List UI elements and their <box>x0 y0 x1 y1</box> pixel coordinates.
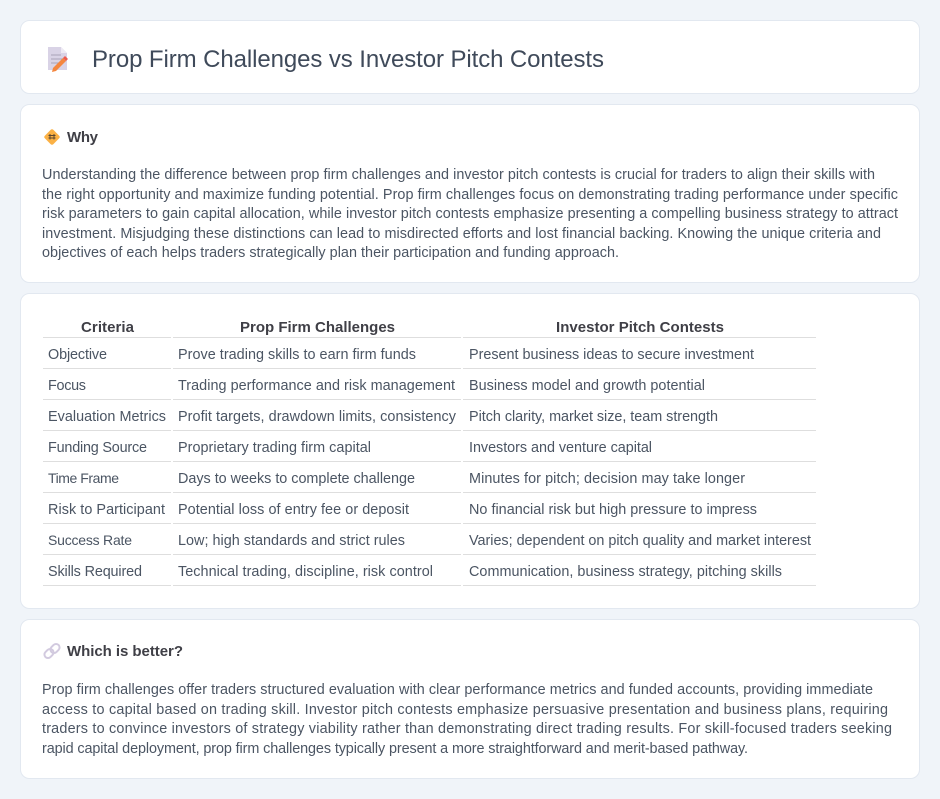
row: evaluation metrics: Profit targets, drawdown limits, consistency <box>178 409 457 425</box>
row: objective: Present business ideas to secure investment <box>469 347 754 363</box>
row: time frame <box>48 470 745 487</box>
row: evaluation metrics: Pitch clarity, market size, team strength <box>469 409 718 425</box>
row: skills required: Skills Required <box>48 564 142 580</box>
row: risk to participant: Potential loss of entry fee or deposit <box>178 502 409 518</box>
row: skills required: Communication, business strategy, pitching skills <box>469 564 782 580</box>
row: risk to participant: Risk to Participant <box>48 502 165 518</box>
row: focus <box>48 378 705 394</box>
row: funding source: Investors and venture capital <box>469 440 652 456</box>
text block: why: risk parameters to gain capital allocation, while investor pitch contests emphasize presenting a compelling business strategy to attract <box>42 206 898 222</box>
text block: why: the right opportunity and maximize funding potential. Prop firm challenges focus on demonstrating trading performance under specific <box>42 187 898 203</box>
text block: which is better <box>42 682 892 757</box>
row: skills required <box>48 564 782 580</box>
panel: comparison table <box>20 294 920 608</box>
row: time frame: Minutes for pitch; decision may take longer <box>469 471 745 487</box>
text block: why: objectives of each helps traders strategically plan their participation and funding approach. <box>42 245 619 261</box>
row: objective <box>48 347 754 363</box>
text block: why: Understanding the difference between prop firm challenges and investor pitch contests is crucial for traders to align their skills with <box>42 167 875 183</box>
title: Prop Firm Challenges vs Investor Pitch Contests <box>92 46 604 73</box>
table header: Prop Firm Challenges <box>240 319 395 336</box>
row: focus: Focus <box>48 378 86 394</box>
row: objective: Prove trading skills to earn firm funds <box>178 347 416 363</box>
row: funding source <box>48 440 652 456</box>
row: success rate: Success Rate <box>48 532 132 548</box>
icon: link <box>43 642 61 660</box>
heading: which is better: Which is better? <box>67 643 183 660</box>
text block: which is better: rapid capital deployment, prop firm challenges typically present a more straightforward and merit-based pathway. <box>42 741 748 757</box>
row: evaluation metrics: Evaluation Metrics <box>48 409 166 425</box>
panel: why <box>20 104 920 282</box>
row: skills required: Technical trading, discipline, risk control <box>178 564 433 580</box>
table header: Investor Pitch Contests <box>556 319 724 336</box>
row: risk to participant: No financial risk but high pressure to impress <box>469 502 757 518</box>
row: focus: Business model and growth potential <box>469 378 705 394</box>
row: funding source: Proprietary trading firm capital <box>178 440 371 456</box>
text block: which is better: access to capital based on trading skill. Investor pitch contests emphasize persuasive presentation and business plans, requiring <box>42 702 888 718</box>
icon: diamond warning sign <box>44 129 60 145</box>
panel: header <box>20 20 920 94</box>
row: evaluation metrics <box>48 409 718 425</box>
row: success rate <box>48 532 811 549</box>
table header <box>81 319 724 336</box>
panel: which is better <box>20 620 920 778</box>
text block: which is better: Prop firm challenges offer traders structured evaluation with clear performance metrics and funded accounts, providing immediate <box>42 682 873 698</box>
row: success rate: Low; high standards and strict rules <box>178 533 405 549</box>
row: success rate: Varies; dependent on pitch quality and market interest <box>469 533 811 549</box>
text block: why: investment. Misjudging these distinctions can lead to misdirected efforts and lost financial backing. Knowing the unique criteria and <box>42 226 881 242</box>
icon: document with pencil <box>48 47 68 72</box>
table header: Criteria <box>81 319 135 336</box>
heading: why: Why <box>67 129 99 146</box>
row: funding source: Funding Source <box>48 440 147 456</box>
row: risk to participant <box>48 502 757 518</box>
row: time frame: Days to weeks to complete challenge <box>178 471 415 487</box>
text block: which is better: traders to convince investors of strategy viability rather than demonstrating direct trading results. For skill-focused traders seeking <box>42 721 892 737</box>
text block: why <box>42 167 898 261</box>
row: time frame: Time Frame <box>48 470 119 486</box>
row: objective: Objective <box>48 347 107 363</box>
row: focus: Trading performance and risk management <box>178 378 455 394</box>
